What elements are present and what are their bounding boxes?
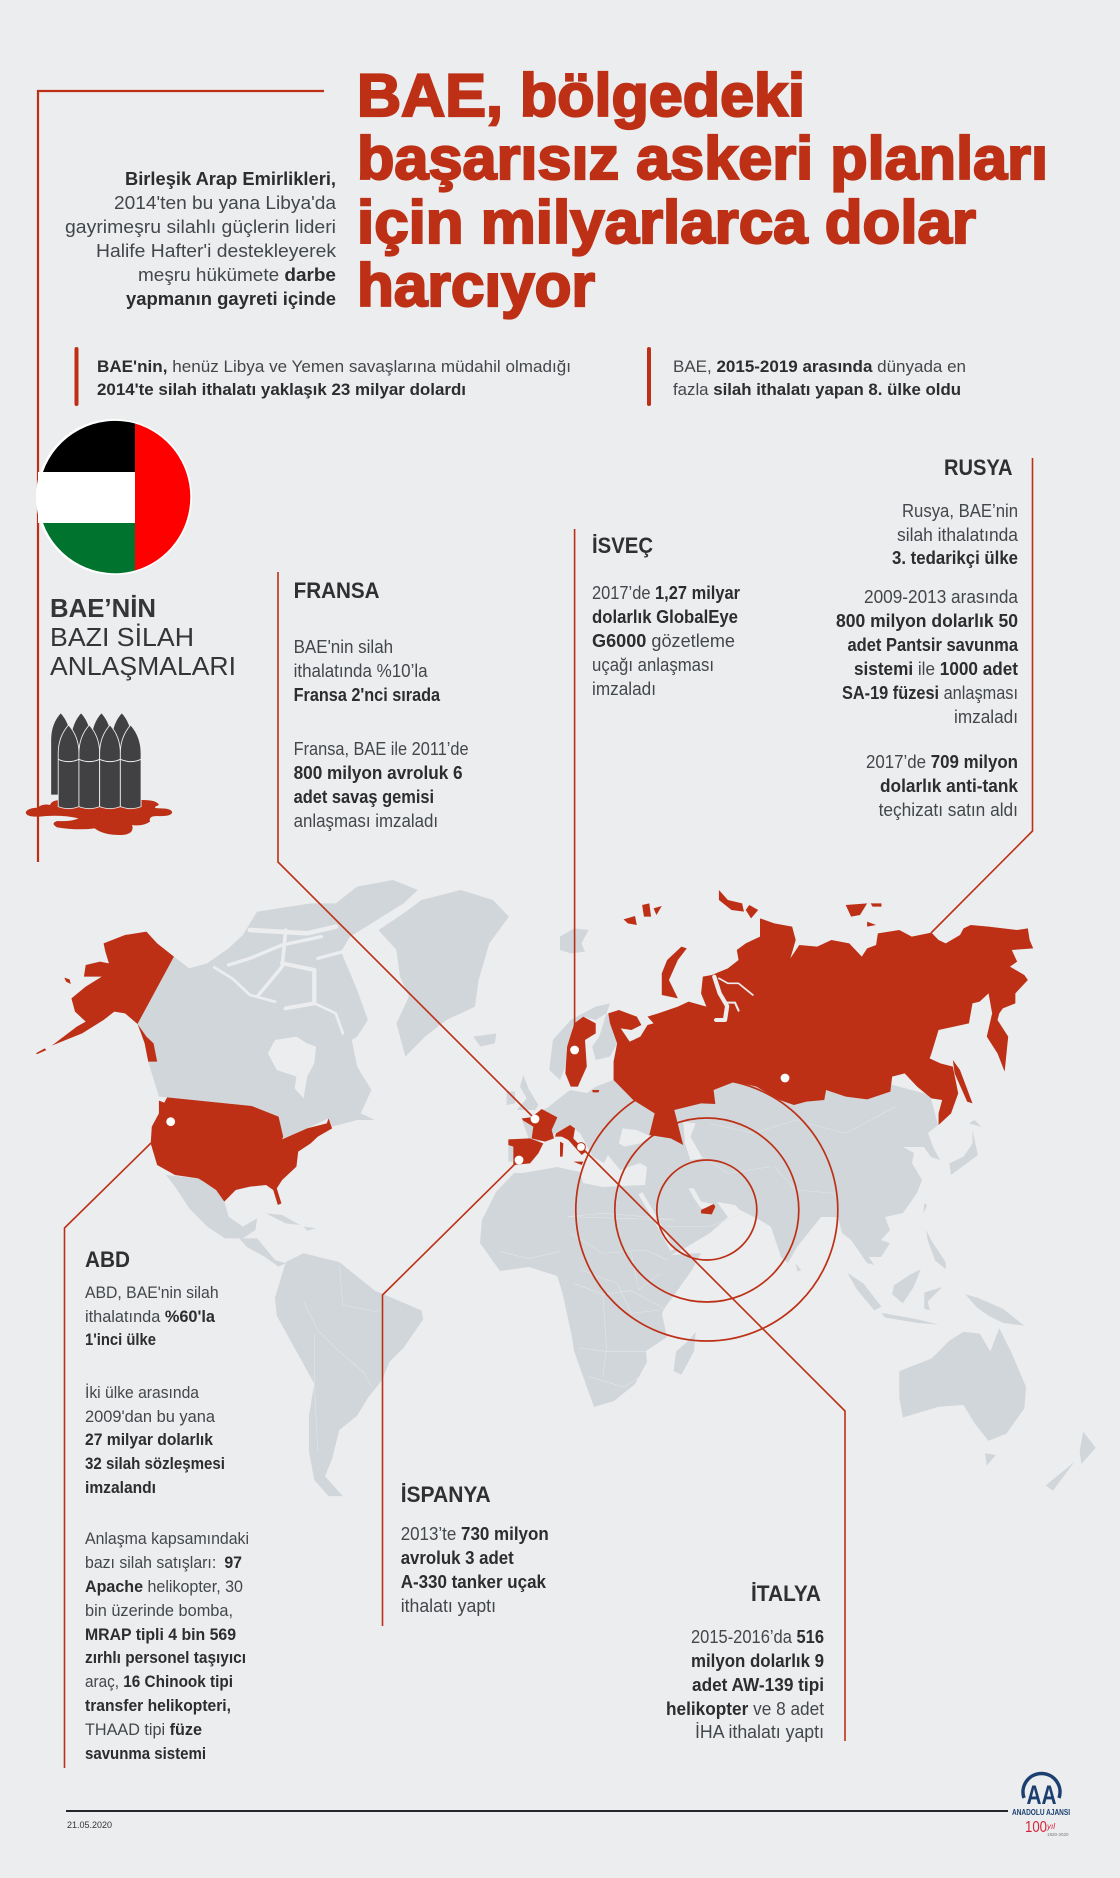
target circles around UAE bbox=[576, 1079, 838, 1341]
panel: İsveç: G6000 gözetleme bbox=[592, 631, 735, 651]
panel: Fransa: Fransa 2'nci sırada bbox=[294, 685, 441, 705]
section heading bbox=[50, 593, 236, 681]
panel: İsveç: uçağı anlaşması bbox=[592, 655, 714, 675]
intro text: 2014'ten bu yana Libya'da bbox=[114, 193, 337, 213]
panel: Fransa: Fransa, BAE ile 2011’de bbox=[294, 739, 469, 759]
title bbox=[357, 62, 1048, 319]
panel: Rusya: SA-19 füzesi anlaşması bbox=[842, 683, 1018, 703]
panel: ABD: ithalatında %60'la bbox=[85, 1307, 216, 1326]
panel: ABD: bin üzerinde bomba, bbox=[85, 1601, 233, 1620]
panel: ABD: Apache helikopter, 30 bbox=[85, 1577, 243, 1596]
panel: ABD: bazı silah satışları: 97 bbox=[85, 1553, 242, 1572]
panel: İsveç bbox=[592, 533, 740, 699]
logo: Anadolu Ajansı bbox=[1012, 1774, 1070, 1837]
key fact: 2014 imports: 2014'te silah ithalatı yaklaşık 23 milyar dolardı bbox=[97, 380, 466, 399]
panel: İtalya: milyon dolarlık 9 bbox=[691, 1651, 824, 1671]
panel: ABD: MRAP tipli 4 bin 569 bbox=[85, 1625, 236, 1644]
panel: Rusya: imzaladı bbox=[954, 707, 1018, 727]
title: BAE, bölgedeki bbox=[357, 62, 805, 129]
panel: ABD: İki ülke arasında bbox=[85, 1383, 199, 1402]
panel: İtalya: adet AW-139 tipi bbox=[692, 1675, 824, 1695]
panel: ABD: ABD bbox=[85, 1247, 130, 1272]
panel: ABD: araç, 16 Chinook tipi bbox=[85, 1672, 233, 1691]
map: gray continents bbox=[137, 880, 1096, 1496]
panel: Rusya: 2009-2013 arasında bbox=[864, 587, 1019, 607]
world map bbox=[36, 458, 1096, 1768]
key fact: 2014 imports bbox=[74, 347, 571, 406]
intro text: yapmanın gayreti içinde bbox=[126, 289, 336, 309]
map: inner seas bbox=[567, 1107, 896, 1313]
panel: Fransa: 800 milyon avroluk 6 bbox=[294, 763, 463, 783]
key fact: 2014 imports: BAE'nin, henüz Libya ve Yemen savaşlarına müdahil olmadığı bbox=[97, 357, 571, 376]
logo: Anadolu Ajansı: yıl bbox=[1046, 1822, 1055, 1831]
panel: ABD: Anlaşma kapsamındaki bbox=[85, 1529, 249, 1548]
panel: Fransa bbox=[294, 578, 469, 831]
panel: Rusya bbox=[836, 455, 1019, 820]
panel: İtalya bbox=[666, 1581, 824, 1742]
intro text: Birleşik Arap Emirlikleri, bbox=[125, 169, 336, 189]
panel: Fransa: anlaşması imzaladı bbox=[294, 811, 438, 831]
panel: ABD: 1'inci ülke bbox=[85, 1330, 156, 1349]
panel: Rusya: teçhizatı satın aldı bbox=[879, 800, 1018, 820]
panel: ABD: ABD, BAE'nin silah bbox=[85, 1283, 219, 1302]
section heading: BAE’NİN bbox=[50, 593, 156, 623]
leader lines bbox=[64, 458, 1032, 1768]
panel: Rusya: Rusya, BAE’nin bbox=[902, 501, 1018, 521]
panel: ABD: imzalandı bbox=[85, 1478, 156, 1497]
section heading: ANLAŞMALARI bbox=[50, 651, 236, 681]
footer rule bbox=[66, 1810, 1008, 1812]
key fact: 2015-2019 rank bbox=[647, 347, 966, 406]
panel: Rusya: 800 milyon dolarlık 50 bbox=[836, 611, 1018, 631]
panel: Fransa: FRANSA bbox=[294, 578, 380, 603]
France, Spain, Italy bbox=[508, 1109, 586, 1165]
panel: İsveç: 2017’de 1,27 milyar bbox=[592, 583, 740, 603]
panel: Fransa: BAE'nin silah bbox=[294, 637, 393, 657]
panel: İspanya: ithalatı yaptı bbox=[401, 1596, 496, 1616]
panel: İtalya: İTALYA bbox=[751, 1581, 821, 1606]
panel: ABD: 27 milyar dolarlık bbox=[85, 1430, 214, 1449]
panel: Rusya: dolarlık anti-tank bbox=[880, 776, 1019, 796]
panel: Rusya: adet Pantsir savunma bbox=[848, 635, 1019, 655]
panel: Fransa: adet savaş gemisi bbox=[294, 787, 434, 807]
panel: Fransa: ithalatında %10’la bbox=[294, 661, 429, 681]
logo: Anadolu Ajansı: AA bbox=[1026, 1780, 1056, 1810]
section heading: BAZI SİLAH bbox=[50, 622, 194, 652]
intro text: Halife Hafter'i destekleyerek bbox=[96, 241, 337, 261]
title: başarısız askeri planları bbox=[357, 125, 1048, 192]
intro text: meşru hükümete darbe bbox=[138, 265, 336, 285]
USA and Alaska bbox=[36, 932, 332, 1205]
panel: ABD: 32 silah sözleşmesi bbox=[85, 1454, 225, 1473]
panel: ABD: zırhlı personel taşıyıcı bbox=[85, 1648, 246, 1667]
panel: İtalya: İHA ithalatı yaptı bbox=[695, 1722, 824, 1742]
logo: Anadolu Ajansı: ANADOLU AJANSI bbox=[1012, 1807, 1070, 1817]
panel: Rusya: RUSYA bbox=[944, 455, 1013, 480]
Russia, Sweden, UAE bbox=[565, 890, 1033, 1214]
panel: ABD: THAAD tipi füze bbox=[85, 1720, 202, 1739]
country location dots bbox=[166, 1046, 789, 1164]
key fact: 2015-2019 rank: fazla silah ithalatı yapan 8. ülke oldu bbox=[673, 380, 961, 399]
intro text bbox=[65, 169, 337, 309]
panel: İsveç: imzaladı bbox=[592, 679, 656, 699]
title: harcıyor bbox=[357, 252, 595, 319]
panel: Rusya: sistemi ile 1000 adet bbox=[854, 659, 1018, 679]
icon: bullets in blood bbox=[26, 713, 172, 835]
panel: Rusya: 3. tedarikçi ülke bbox=[892, 548, 1018, 568]
date: 21.05.2020 bbox=[67, 1820, 112, 1830]
panel: ABD: savunma sistemi bbox=[85, 1744, 206, 1763]
panel: İsveç: dolarlık GlobalEye bbox=[592, 607, 738, 627]
logo: Anadolu Ajansı: 100 bbox=[1025, 1819, 1047, 1836]
key fact: 2015-2019 rank: BAE, 2015-2019 arasında dünyada en bbox=[673, 357, 966, 376]
icon: UAE flag circle bbox=[36, 419, 192, 575]
top-left frame line bbox=[38, 91, 324, 862]
highlighted countries bbox=[36, 890, 1033, 1214]
panel: İsveç: İSVEÇ bbox=[592, 533, 653, 558]
panel: Rusya: 2017’de 709 milyon bbox=[866, 752, 1018, 772]
title: için milyarlarca dolar bbox=[357, 189, 976, 256]
panel: İspanya: 2013’te 730 milyon bbox=[401, 1524, 549, 1544]
panel: ABD: transfer helikopteri, bbox=[85, 1696, 231, 1715]
panel: İspanya: İSPANYA bbox=[401, 1482, 491, 1507]
panel: ABD bbox=[85, 1247, 249, 1763]
panel: ABD: 2009'dan bu yana bbox=[85, 1407, 216, 1426]
intro text: gayrimeşru silahlı güçlerin lideri bbox=[65, 217, 336, 237]
panel: İtalya: 2015-2016’da 516 bbox=[691, 1627, 824, 1647]
panel: İspanya: avroluk 3 adet bbox=[401, 1548, 514, 1568]
panel: İspanya bbox=[401, 1482, 549, 1616]
panel: İtalya: helikopter ve 8 adet bbox=[666, 1699, 824, 1719]
logo: Anadolu Ajansı: 1920-2020 bbox=[1047, 1832, 1069, 1837]
panel: İspanya: A-330 tanker uçak bbox=[401, 1572, 547, 1592]
panel: Rusya: silah ithalatında bbox=[897, 525, 1019, 545]
